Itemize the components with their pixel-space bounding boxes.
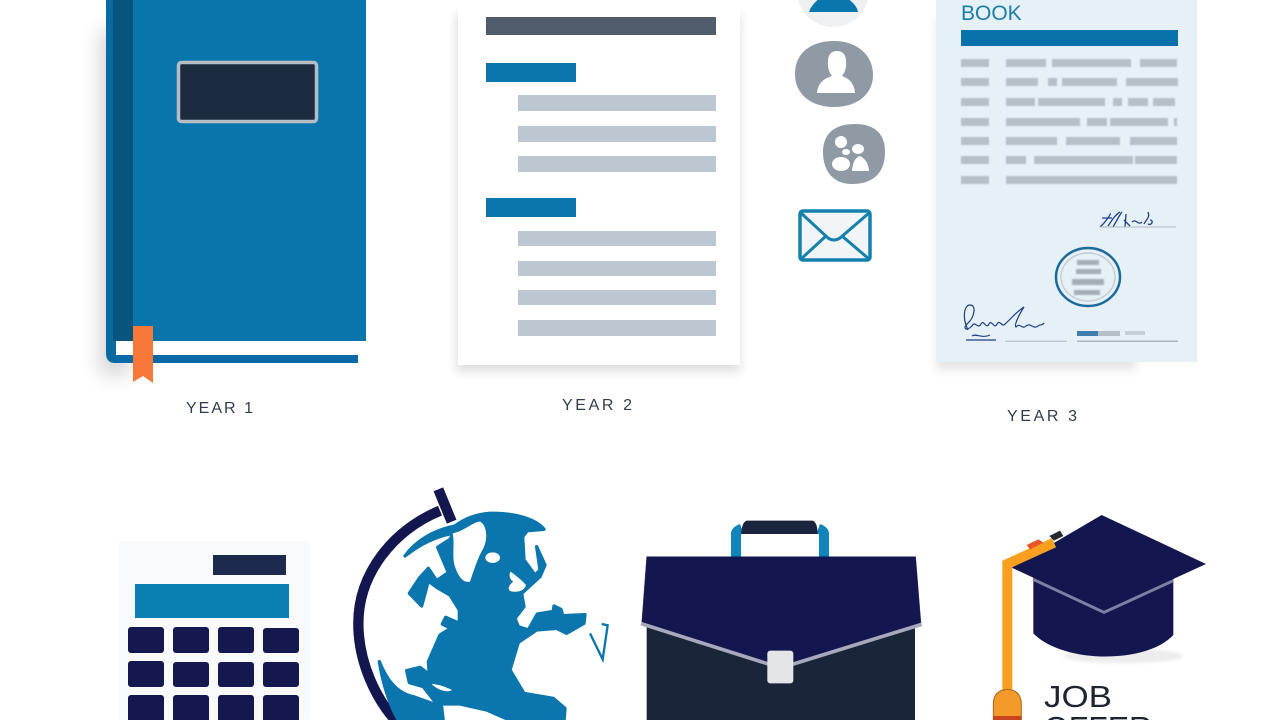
icon: profile badge top <box>797 0 869 27</box>
briefcase body <box>647 625 915 720</box>
certificate text rows <box>961 59 1178 184</box>
cap top <box>1012 515 1206 611</box>
calculator display <box>135 584 289 618</box>
briefcase flap <box>642 557 921 665</box>
certificate title: BOOK <box>961 2 1022 25</box>
panel: year 3 certificate <box>936 0 1197 370</box>
section two <box>486 198 716 336</box>
calculator keys <box>128 627 299 720</box>
icon: closed blue book <box>100 0 366 383</box>
tassel bulb <box>993 689 1021 720</box>
label: job offer: JOB <box>1044 679 1112 714</box>
icon: globe <box>358 489 608 720</box>
label: job offer <box>1044 679 1152 720</box>
icon: briefcase <box>641 521 922 720</box>
panel: year 2 document <box>456 0 741 372</box>
flap edge <box>641 624 922 664</box>
calculator top label <box>213 555 286 575</box>
label: year 2: YEAR 2 <box>562 397 632 414</box>
bookmark ribbon <box>133 326 153 383</box>
icon: single person badge <box>795 41 873 107</box>
globe right fragment <box>590 624 608 659</box>
icon: envelope <box>800 211 870 260</box>
icon: group badge <box>823 124 885 184</box>
top signature <box>1100 212 1176 227</box>
signature lines <box>1005 331 1178 342</box>
document heading bar <box>486 17 716 35</box>
label: year 3: YEAR 3 <box>1007 408 1077 425</box>
bottom signature <box>964 305 1044 340</box>
round seal <box>1056 248 1120 306</box>
icon: graduation cap with tassel <box>993 515 1206 720</box>
icon: calculator <box>118 541 310 720</box>
book title plate <box>178 62 316 122</box>
label: year 1: YEAR 1 <box>186 400 253 417</box>
certificate title bar <box>961 30 1178 46</box>
globe white continents <box>432 522 526 691</box>
globe stand arc <box>358 489 452 720</box>
cap base <box>1033 567 1173 657</box>
globe landmass and ocean <box>379 513 585 720</box>
tassel cord <box>1007 543 1054 692</box>
briefcase handle <box>736 521 824 557</box>
briefcase clasp <box>767 651 793 683</box>
section one <box>486 63 716 172</box>
